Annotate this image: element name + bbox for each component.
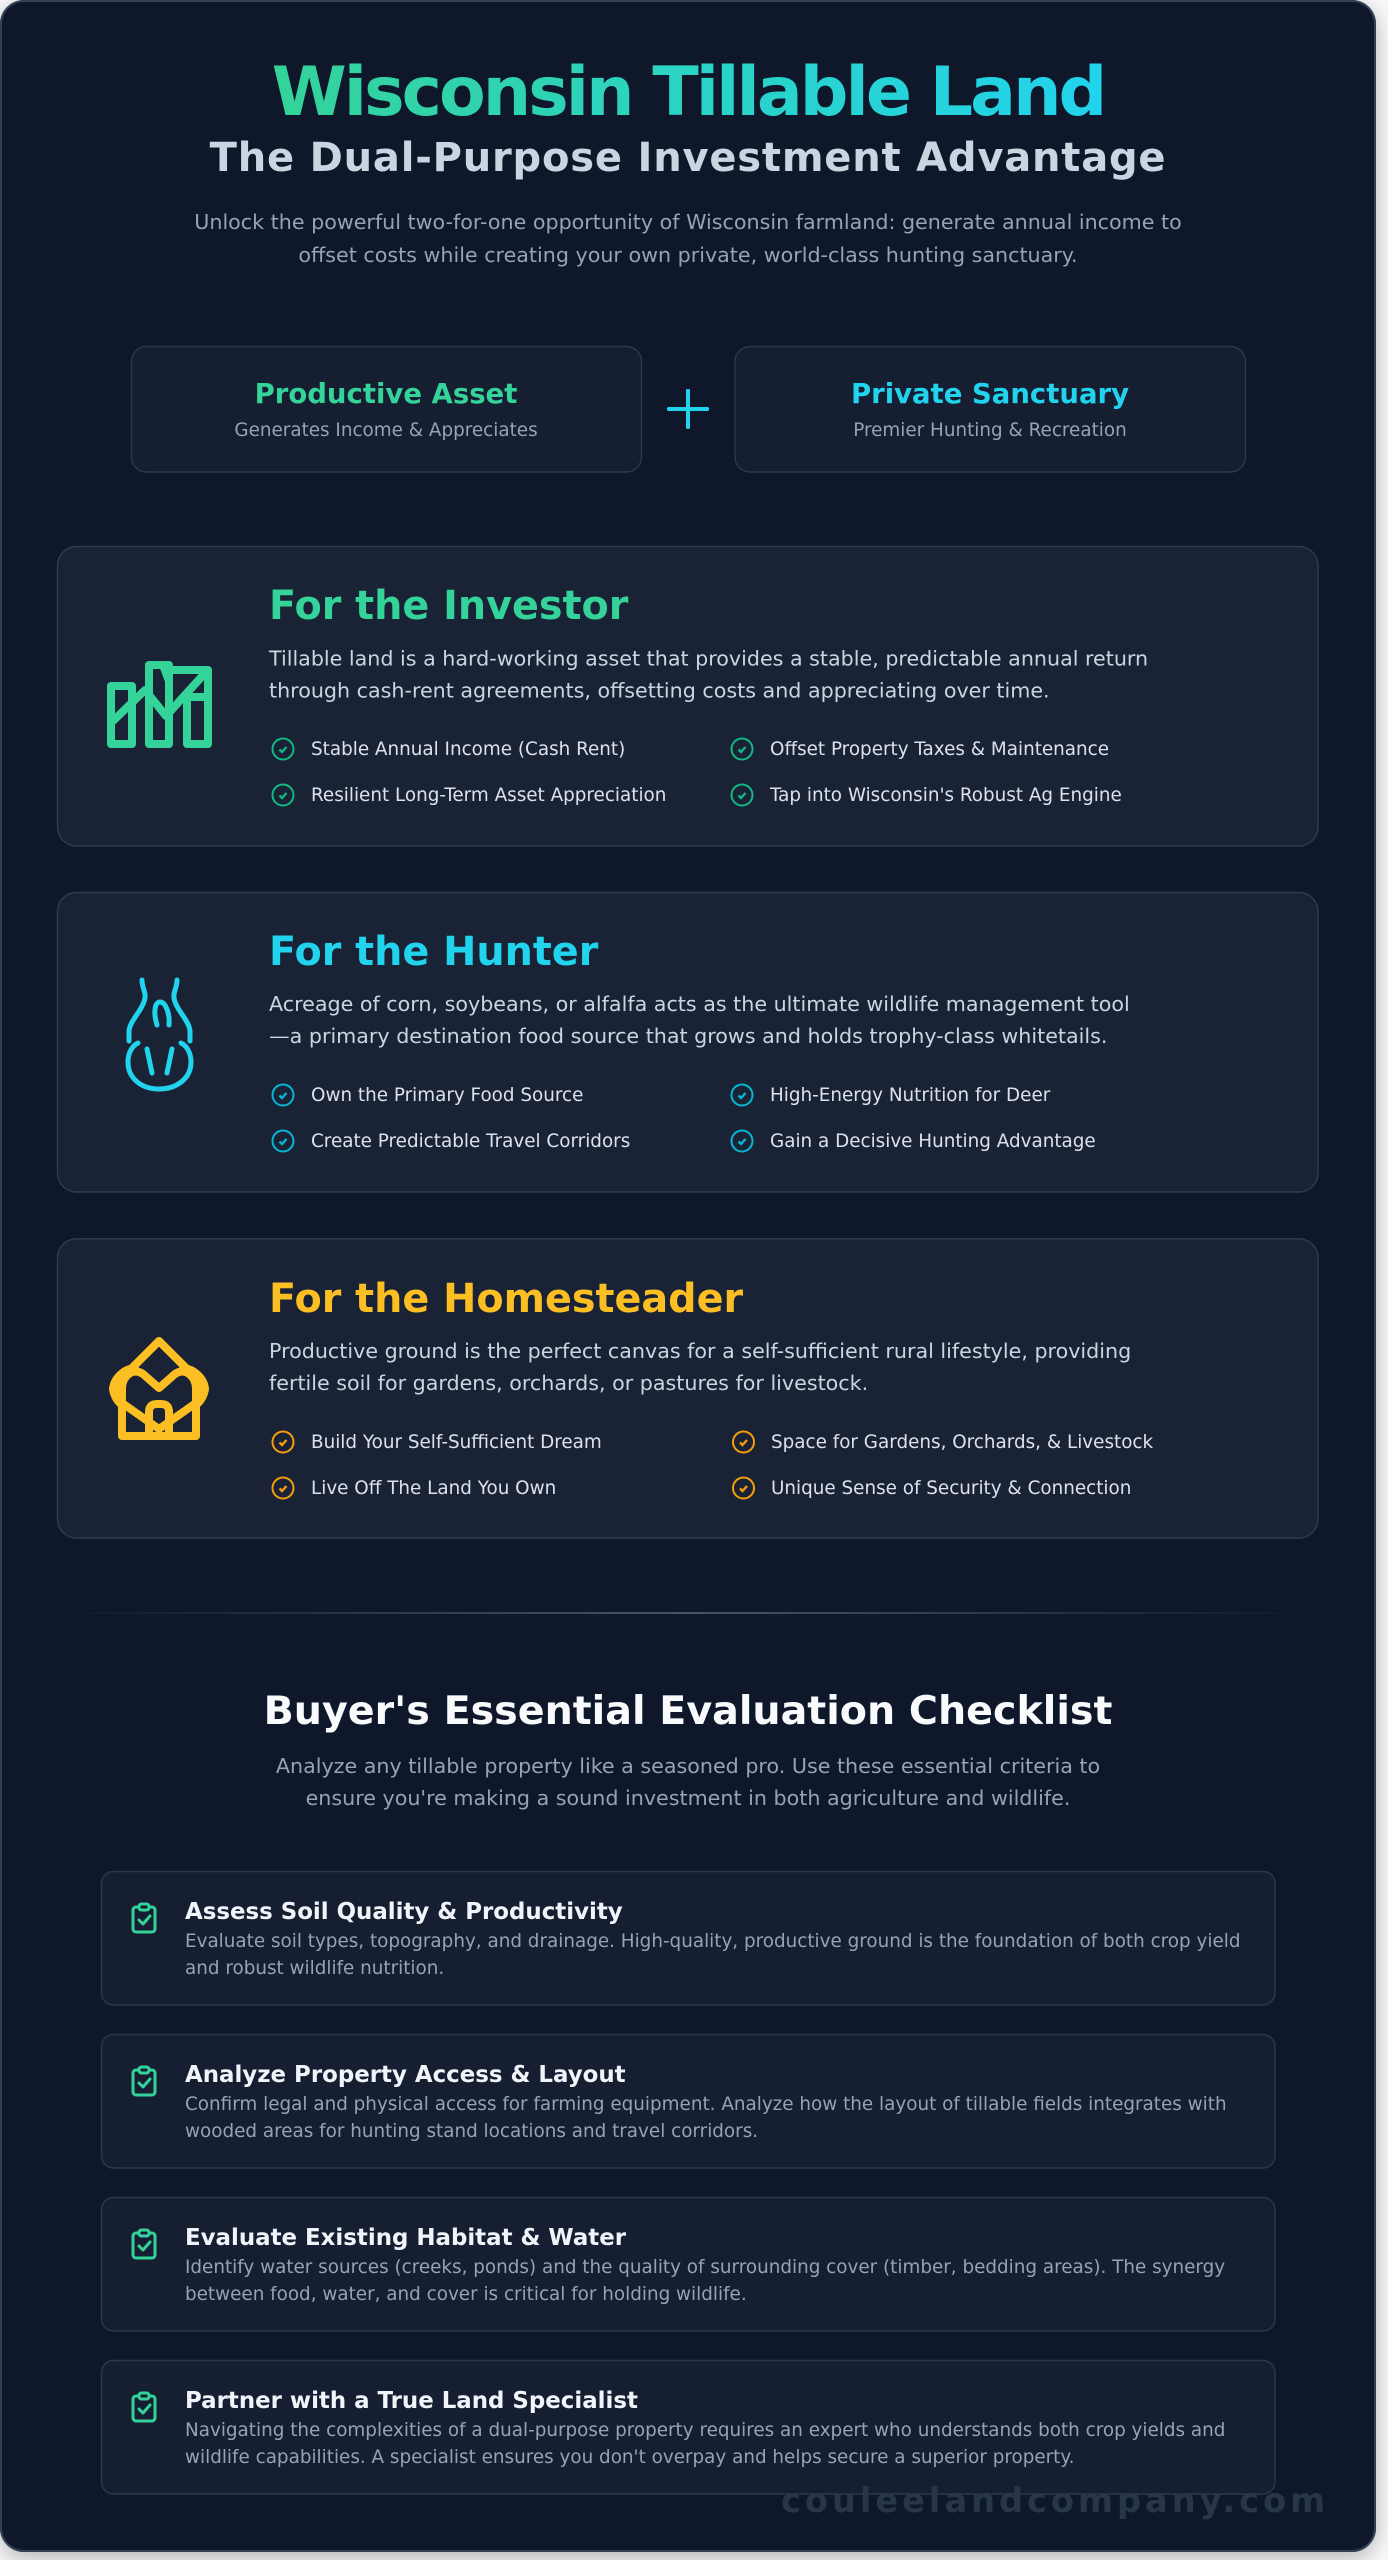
title: Wisconsin Tillable Land (272, 53, 1104, 132)
icon: clipboard check (133, 2067, 155, 2095)
panel: productive asset (132, 346, 642, 472)
checklist item: habitat: Identify water sources (creeks, ponds) and the quality of surrounding cover (timber, bedding areas). The synergy (185, 2257, 1225, 2278)
subtitle: The Dual-Purpose Investment Advantage (210, 135, 1166, 181)
panel: for the homesteader (58, 1239, 1318, 1538)
panel: private sanctuary: Private Sanctuary (851, 378, 1129, 410)
checklist item: soil (102, 1872, 1275, 2005)
description (269, 1339, 1131, 1395)
checklist item: access: Analyze Property Access & Layout (185, 2062, 626, 2088)
checklist item: soil: Assess Soil Quality & Productivity (185, 1899, 623, 1925)
benefit list: Offset Property Taxes & Maintenance (770, 739, 1109, 760)
checklist intro (276, 1754, 1100, 1810)
benefit list: High-Energy Nutrition for Deer (770, 1085, 1051, 1106)
watermark: couleelandcompany.com (781, 2481, 1329, 2520)
benefit list: Create Predictable Travel Corridors (311, 1131, 630, 1152)
icon: deer head (128, 980, 191, 1089)
checklist item: access: Confirm legal and physical access for farming equipment. Analyze how the layout of tillable fields integrates with (185, 2094, 1227, 2115)
intro text: Unlock the powerful two-for-one opportunity of Wisconsin farmland: generate annual income to (194, 210, 1182, 234)
panel: private sanctuary (735, 346, 1246, 472)
checklist item: soil: and robust wildlife nutrition. (185, 1958, 444, 1979)
benefit list: Unique Sense of Security & Connection (771, 1478, 1131, 1499)
description: Acreage of corn, soybeans, or alfalfa acts as the ultimate wildlife management tool (269, 992, 1130, 1016)
intro text: offset costs while creating your own private, world-class hunting sanctuary. (298, 243, 1078, 267)
icon: clipboard check (133, 2393, 155, 2421)
checklist item: habitat (102, 2198, 1275, 2331)
icon: house with heart (113, 1341, 205, 1436)
description: Tillable land is a hard-working asset that provides a stable, predictable annual return (268, 646, 1148, 670)
checklist item: soil: Evaluate soil types, topography, and drainage. High-quality, productive ground is the foundation of both crop yield (185, 1931, 1240, 1952)
checklist intro: Analyze any tillable property like a seasoned pro. Use these essential criteria to (276, 1754, 1100, 1778)
checklist item: specialist: wildlife capabilities. A specialist ensures you don't overpay and helps secure a superior property. (185, 2447, 1074, 2468)
benefit list: Own the Primary Food Source (311, 1085, 583, 1106)
heading: For the Hunter (269, 929, 599, 975)
benefit list (272, 1084, 1096, 1152)
intro text (194, 210, 1182, 267)
benefit list: Space for Gardens, Orchards, & Livestock (771, 1432, 1153, 1453)
benefit list (272, 738, 1122, 806)
checklist item: habitat: between food, water, and cover is critical for holding wildlife. (185, 2284, 747, 2305)
description (268, 646, 1148, 702)
icon: bar chart with trend arrow (111, 665, 208, 744)
panel: productive asset: Productive Asset (255, 378, 517, 410)
benefit list: Resilient Long-Term Asset Appreciation (311, 785, 666, 806)
description: —a primary destination food source that grows and holds trophy-class whitetails. (269, 1024, 1107, 1048)
benefit list: Live Off The Land You Own (311, 1478, 556, 1499)
panel: for the investor (58, 546, 1318, 846)
checklist item: specialist: Partner with a True Land Specialist (185, 2388, 638, 2414)
heading: For the Homesteader (269, 1276, 743, 1322)
checklist heading: Buyer's Essential Evaluation Checklist (264, 1688, 1112, 1734)
description (269, 992, 1130, 1048)
checklist item: access (102, 2034, 1275, 2168)
description: fertile soil for gardens, orchards, or pastures for livestock. (269, 1371, 868, 1395)
checklist item: habitat: Evaluate Existing Habitat & Water (185, 2225, 627, 2251)
panel: productive asset: Generates Income & Appreciates (234, 420, 538, 441)
checklist item: specialist (102, 2360, 1275, 2494)
benefit list (272, 1432, 1153, 1499)
description: Productive ground is the perfect canvas for a self-sufficient rural lifestyle, providing (269, 1339, 1131, 1363)
icon: clipboard check (133, 1904, 155, 1932)
checklist item: specialist: Navigating the complexities of a dual-purpose property requires an expert who understands both crop yields and (185, 2420, 1225, 2441)
checklist intro: ensure you're making a sound investment in both agriculture and wildlife. (306, 1786, 1070, 1810)
checklist item: access: wooded areas for hunting stand locations and travel corridors. (185, 2121, 758, 2142)
panel: private sanctuary: Premier Hunting & Recreation (853, 420, 1127, 441)
benefit list: Stable Annual Income (Cash Rent) (311, 739, 625, 760)
heading: For the Investor (269, 583, 629, 629)
icon: clipboard check (133, 2230, 155, 2258)
plus sign (667, 389, 709, 429)
description: through cash-rent agreements, offsetting costs and appreciating over time. (269, 678, 1050, 702)
benefit list: Build Your Self-Sufficient Dream (311, 1432, 602, 1453)
benefit list: Gain a Decisive Hunting Advantage (770, 1131, 1096, 1152)
panel: for the hunter (58, 892, 1318, 1192)
benefit list: Tap into Wisconsin's Robust Ag Engine (769, 785, 1122, 806)
